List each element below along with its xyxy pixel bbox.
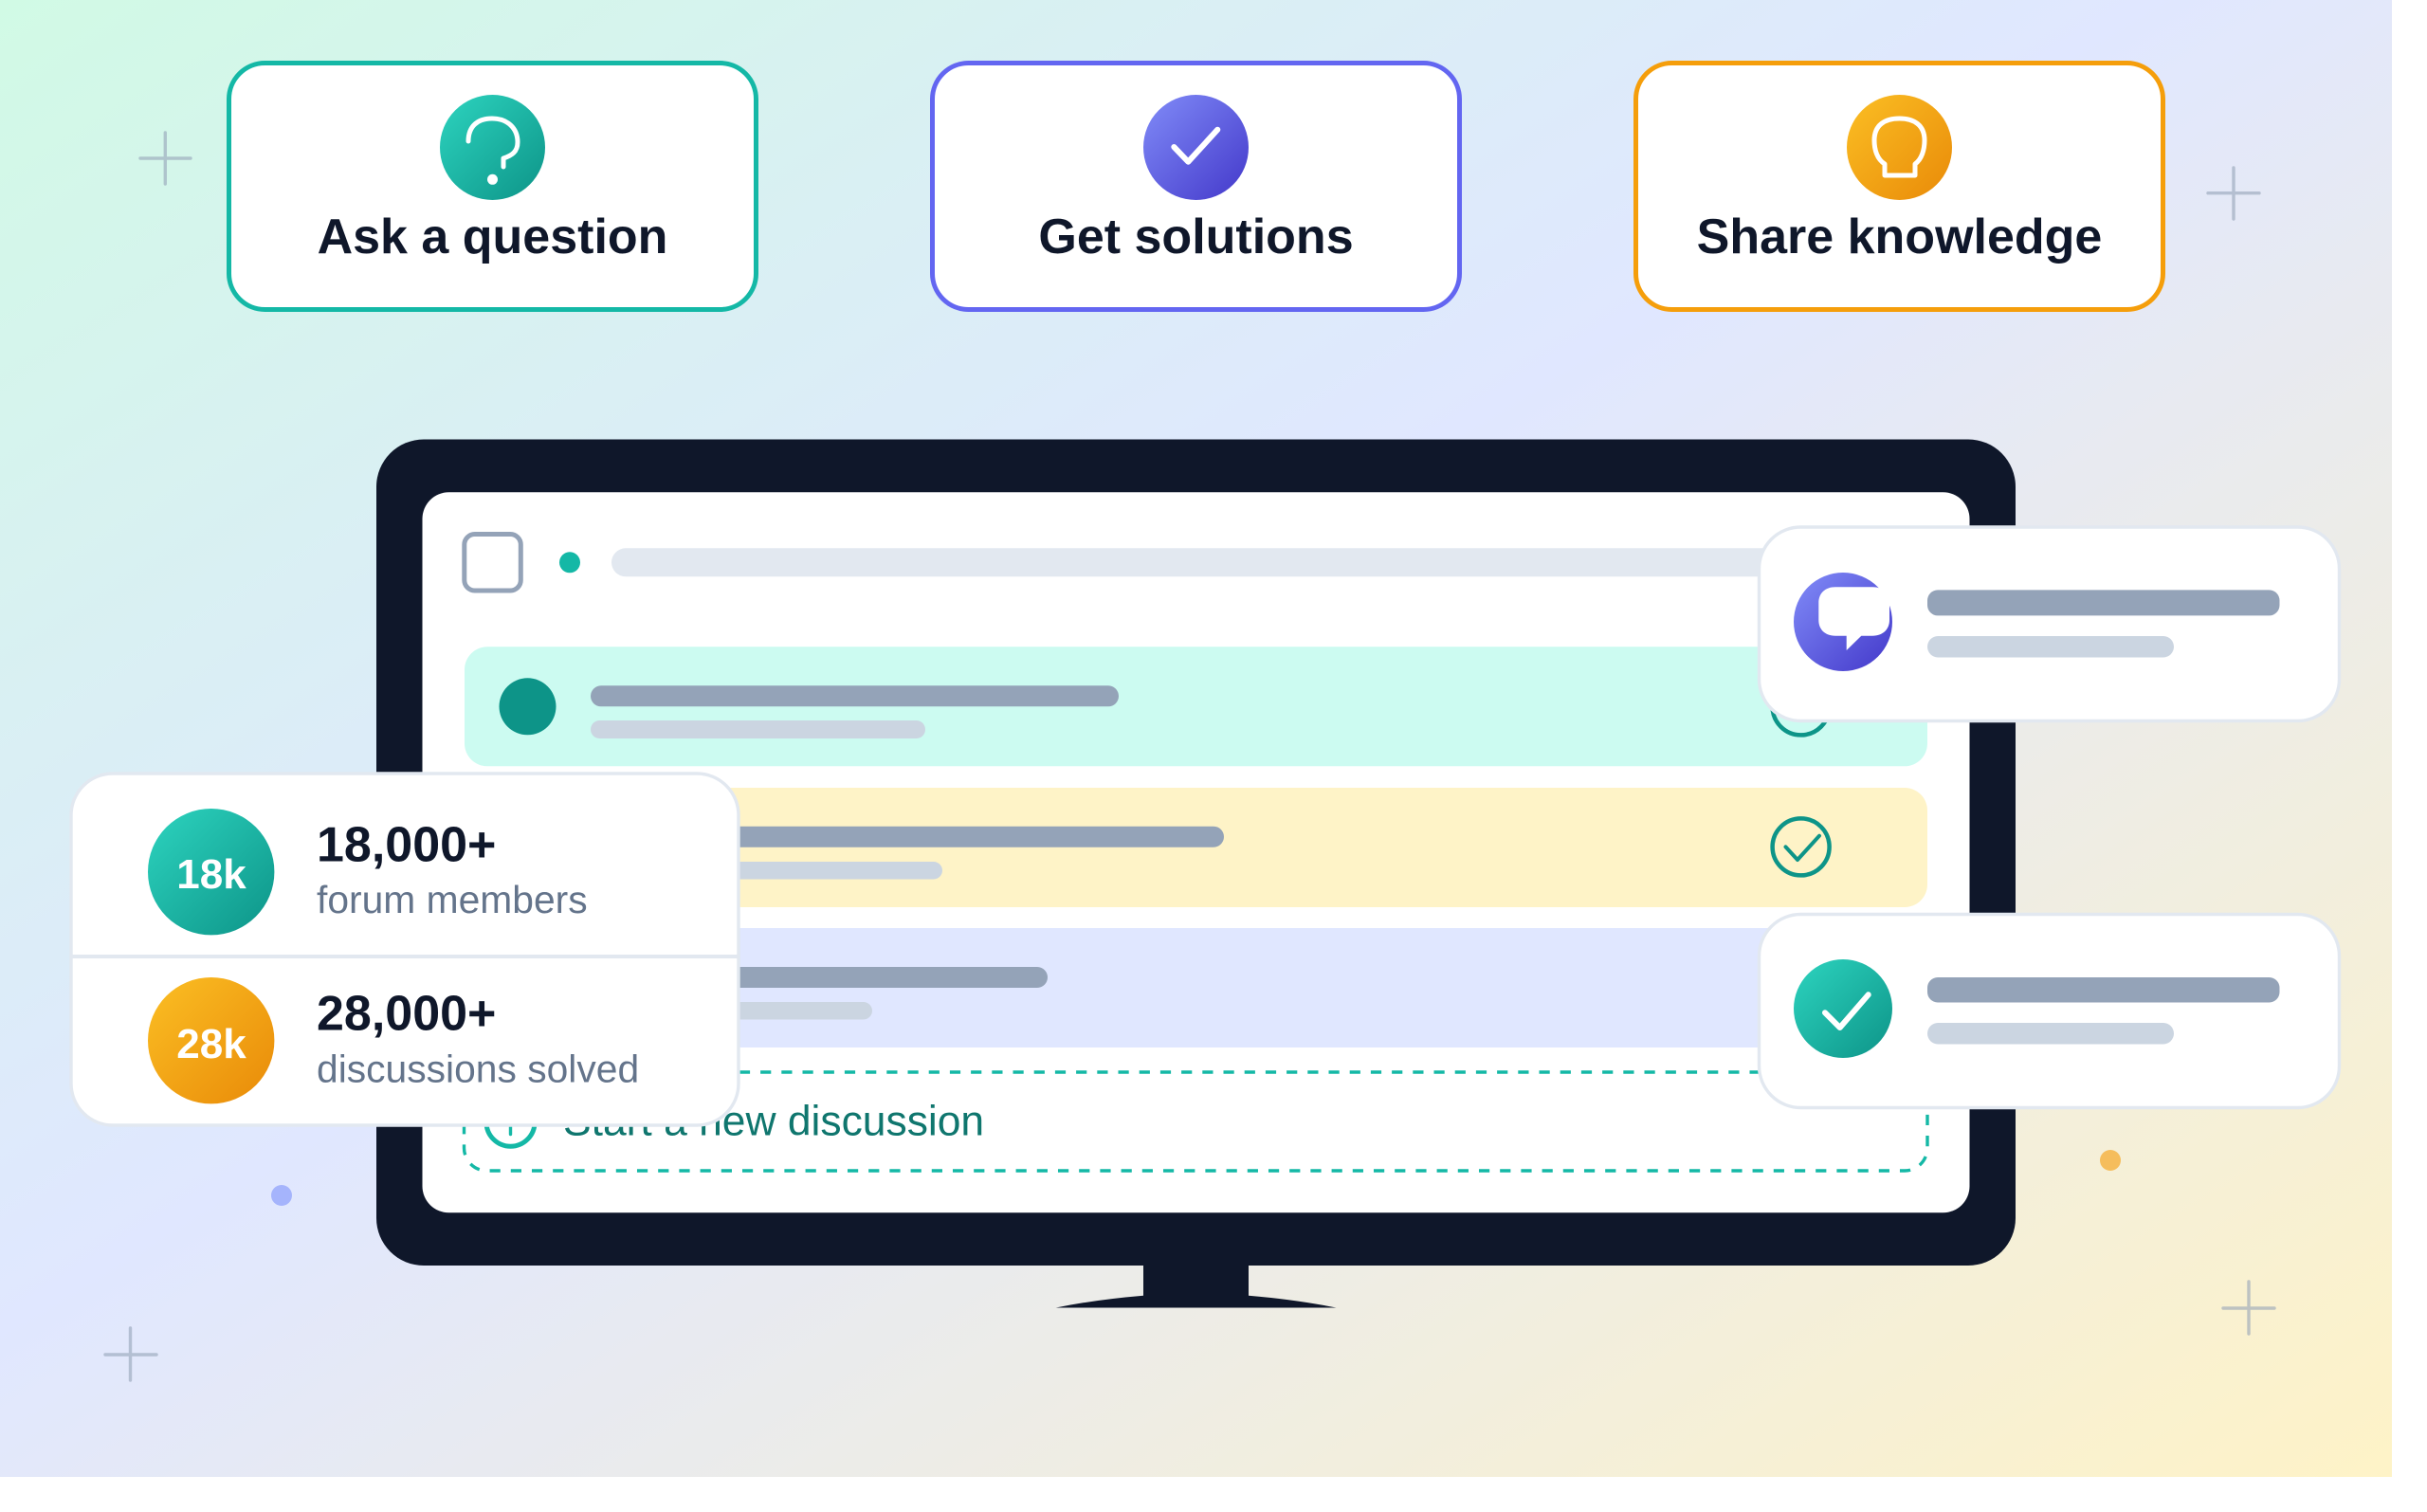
decorative dot: orange: [2100, 1150, 2121, 1171]
row 1: mint: [465, 647, 1927, 766]
row 2: yellow: [465, 788, 1927, 907]
stat: discussions solved: discussions solved: [317, 1047, 639, 1091]
row 3: lavender: [465, 928, 1927, 1047]
toolbar status dot: [559, 552, 580, 573]
icon: light bulb: [1847, 95, 1952, 200]
panel: solved notification: [1760, 914, 2340, 1107]
new discussion dashed box: [465, 1072, 1927, 1171]
card label: Ask a question: [318, 209, 667, 264]
card: Ask a question: [229, 63, 757, 309]
stat: forum members: 18k: [176, 851, 246, 898]
toolbar checkbox: [465, 535, 520, 591]
panel: forum stats: [71, 774, 739, 1125]
card label: Get solutions: [1038, 209, 1354, 264]
stat: discussions solved: 28,000+: [317, 987, 496, 1042]
icon: speech bubble: [1794, 573, 1892, 671]
card: Share knowledge: [1636, 63, 2163, 309]
monitor screen: [423, 492, 1970, 1212]
stat: discussions solved: [148, 977, 639, 1103]
monitor: [376, 440, 2016, 1308]
panel: chat notification: [1760, 527, 2340, 720]
icon: solved check: [1794, 959, 1892, 1058]
stat: discussions solved: 28k: [176, 1021, 246, 1067]
icon: question mark: [440, 95, 545, 200]
placeholder lines: [1927, 590, 2279, 658]
card label: Share knowledge: [1697, 209, 2102, 264]
stat: forum members: forum members: [317, 878, 588, 921]
monitor bezel: [376, 440, 2016, 1266]
stat: forum members: 18,000+: [317, 817, 496, 872]
icon: add circle: [486, 1098, 535, 1146]
new discussion label: Start a new discussion: [563, 1099, 984, 1145]
toolbar address bar: [611, 548, 1927, 576]
stat: forum members: [148, 809, 588, 935]
decorative dot: purple: [271, 1185, 292, 1206]
decorative plus marks: [105, 133, 2274, 1380]
icon: check mark: [1143, 95, 1249, 200]
icon: row check: [1773, 818, 1830, 875]
card: Get solutions: [933, 63, 1460, 309]
placeholder lines: [1927, 977, 2279, 1045]
monitor stand: [1056, 1261, 1337, 1308]
